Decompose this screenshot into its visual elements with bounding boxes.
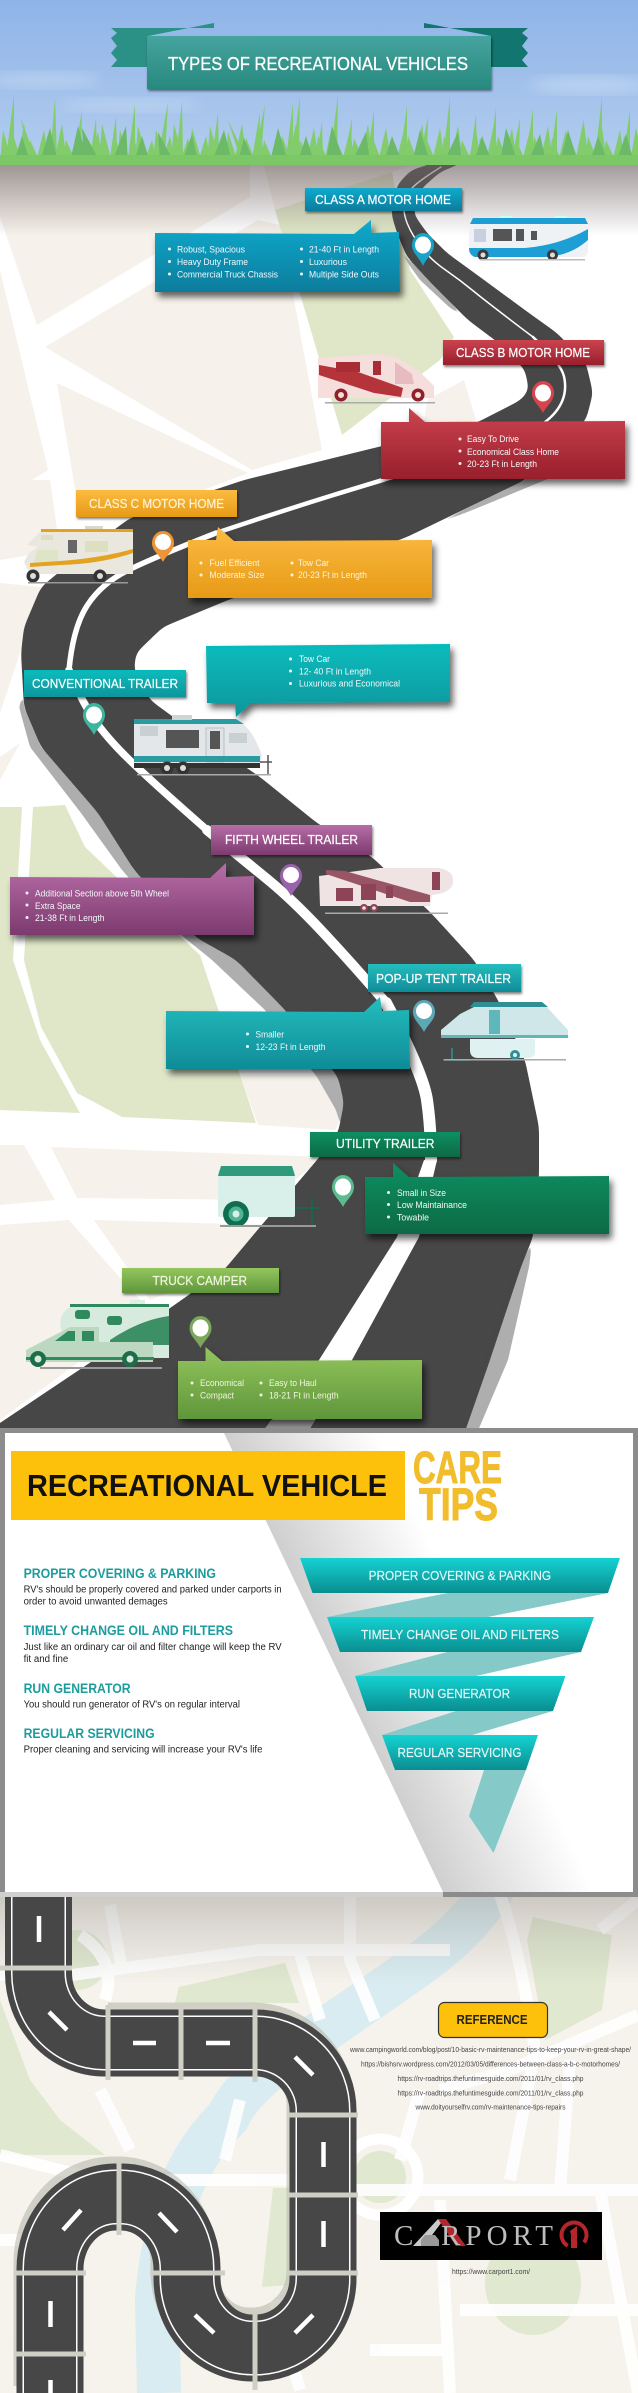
road segment joints [0,1968,358,2390]
logo: carport [380,2212,602,2260]
info box: class A: Commercial Truck Chassis [177,270,278,280]
info box: class A: 21-40 Ft in Length [309,244,379,254]
icon: pin B [532,381,554,413]
diagonal shadow [224,1433,633,1892]
reference links [349,2045,632,2112]
yellow header: RECREATIONAL VEHICLE [27,1468,387,1503]
info box: truck camper: Economical [200,1378,244,1388]
ribbon body [147,36,491,89]
info box: class A: Multiple Side Outs [309,270,379,280]
vehicle: class C RV [24,526,133,584]
tip 2: fit and fine [24,1654,69,1665]
road asphalt [38,1897,323,2393]
info box: class A: Luxurious [309,257,347,267]
section: class B motor home [318,340,625,479]
funnel tier 3: RUN GENERATOR [409,1686,510,1701]
title ribbon banner [111,23,528,89]
info box: class C: Fuel Efficient [210,558,260,568]
icon: pin pop-up [413,1000,435,1032]
icon: pin conventional [83,703,105,735]
lane dashes [39,1916,324,2393]
section: truck camper [26,1268,422,1419]
reference links: www.doityourselfrv.com/rv-maintenance-tips-repairs [415,2102,566,2112]
label: class B: CLASS B MOTOR HOME [456,346,590,360]
funnel tier 4: REGULAR SERVICING [398,1745,522,1760]
icon: pin truck camper [190,1316,212,1348]
tip list [24,1566,282,1756]
panel frame [2,1430,636,1894]
info box: class B [381,408,625,479]
section: fifth wheel trailer [10,825,453,935]
icon: pin fifth wheel [280,864,302,896]
info box: truck camper: Easy to Haul [269,1378,317,1388]
care tips heading: TIPS [419,1479,498,1530]
vehicle: travel trailer [134,715,272,776]
reference links: https://rv-roadtrips.thefuntimesguide.com/2011/01/rv_class.php [398,2088,584,2098]
label: utility: UTILITY TRAILER [336,1137,434,1151]
logo: carport: C [394,2220,413,2252]
label: pop-up: POP-UP TENT TRAILER [376,972,511,986]
label: fifth wheel [211,825,372,855]
winding road [0,150,593,1460]
reference links: https://rv-roadtrips.thefuntimesguide.com/2011/01/rv_class.php [398,2074,584,2083]
tip 2: Just like an ordinary car oil and filter change will keep the RV [24,1642,282,1653]
info box: fifth wheel: Additional Section above 5th Wheel [35,888,169,898]
icon: pin C [152,531,174,562]
label: conventional [24,670,186,697]
section: conventional trailer [24,644,450,776]
section: class A motor home [155,188,588,292]
funnel tier 2: TIMELY CHANGE OIL AND FILTERS [361,1627,559,1642]
vehicle: class A RV [469,216,588,260]
label: class C [76,490,237,517]
reference sign [438,2002,548,2038]
ribbon tails [111,23,214,67]
info box: utility [365,1163,609,1234]
info box: utility: Low Maintainance [397,1200,467,1210]
funnel tier 4 [382,1735,538,1770]
city map background upper [0,160,638,1430]
vehicle: utility trailer [218,1166,319,1227]
sky background [0,0,638,165]
logo: carport: RPORT [441,2220,553,2252]
info box: pop-up: Smaller [256,1030,284,1040]
road shadow [47,2036,320,2386]
section: utility trailer [218,1132,609,1234]
vehicle: truck camper [26,1300,169,1369]
label: class A: CLASS A MOTOR HOME [315,193,451,207]
info box: class A [155,220,400,292]
grass cast shadow [0,164,638,236]
info box: fifth wheel: Extra Space [35,901,80,911]
section: class C motor home [24,490,432,598]
label: class B [443,340,604,365]
logo url: https://www.carport1.com/ [452,2267,531,2276]
grass strip [0,94,638,165]
info box: truck camper: 18-21 Ft in Length [269,1390,339,1400]
funnel chart [300,1558,620,1853]
info box: pop-up: 12-23 Ft in Length [256,1042,326,1052]
label: pop-up [368,964,521,992]
info box: truck camper [178,1347,422,1419]
label: truck camper: TRUCK CAMPER [152,1274,247,1288]
info box: class C [188,527,432,598]
title: TYPES OF RECREATIONAL VEHICLES [168,53,468,74]
info box: class C: 20-23 Ft in Length [298,570,367,580]
label: class C: CLASS C MOTOR HOME [89,497,224,511]
funnel tier 3 [355,1676,566,1711]
label: conventional: CONVENTIONAL TRAILER [32,677,178,691]
city map background lower [0,1885,638,2393]
icon: pin utility [332,1175,354,1207]
yellow header [11,1451,405,1520]
decorative serpentine road [0,1897,358,2393]
info box: pop-up [166,997,410,1069]
tip 3 [24,1681,240,1710]
info box: conventional: 12- 40 Ft in Length [299,666,371,676]
vehicle: class B RV [318,354,435,404]
tip 4: REGULAR SERVICING [24,1726,155,1741]
tip 1: RV's should be properly covered and parked under carports in [24,1584,282,1596]
info box: conventional: Luxurious and Economical [299,678,400,688]
label: class A [305,188,462,211]
info box: class A: Robust, Spacious [177,244,245,254]
funnel tier 2 [327,1617,594,1652]
label: utility [310,1132,460,1157]
info box: utility: Small in Size [397,1188,446,1198]
funnel tier 1: PROPER COVERING & PARKING [369,1568,551,1583]
info box: conventional [206,644,450,717]
vehicle: fifth wheel [319,868,453,914]
tip 4 [24,1726,263,1756]
info box: fifth wheel [10,863,254,935]
info box: fifth wheel: 21-38 Ft in Length [35,913,104,923]
vehicle: pop-up camper [441,1002,568,1060]
label: truck camper [122,1268,279,1293]
care tips heading [413,1442,502,1530]
tip 3: RUN GENERATOR [24,1681,131,1696]
tip 1: order to avoid unwanted demages [24,1596,168,1608]
info box: conventional: Tow Car [299,654,330,664]
tip 2 [24,1623,282,1665]
tip 1 [24,1566,282,1608]
label: fifth wheel: FIFTH WHEEL TRAILER [225,833,358,847]
tip 2: TIMELY CHANGE OIL AND FILTERS [24,1623,233,1638]
reference sign: REFERENCE [456,2012,528,2027]
road shoulders [19,240,575,1440]
info box: class C: Moderate Size [210,570,264,580]
tip 4: Proper cleaning and servicing will increase your RV's life [24,1744,263,1756]
icon: pin A [412,233,434,266]
info box: class B: Easy To Drive [467,434,519,444]
info box: class C: Tow Car [298,558,329,568]
info box: class B: 20-23 Ft in Length [467,459,537,469]
section: pop-up tent trailer [166,964,568,1069]
info box: utility: Towable [397,1212,429,1222]
info box: class B: Economical Class Home [467,447,559,457]
funnel tier 1 [300,1558,620,1593]
road edge lines [38,1897,323,2393]
info box: truck camper: Compact [200,1390,234,1400]
tip 3: You should run generator of RV's on regular interval [24,1700,240,1710]
road surface [38,1897,323,2393]
tip 1: PROPER COVERING & PARKING [24,1566,216,1581]
care tips heading: CARE [413,1442,502,1493]
info box: class A: Heavy Duty Frame [177,257,248,267]
care tips panel [0,1430,636,1897]
